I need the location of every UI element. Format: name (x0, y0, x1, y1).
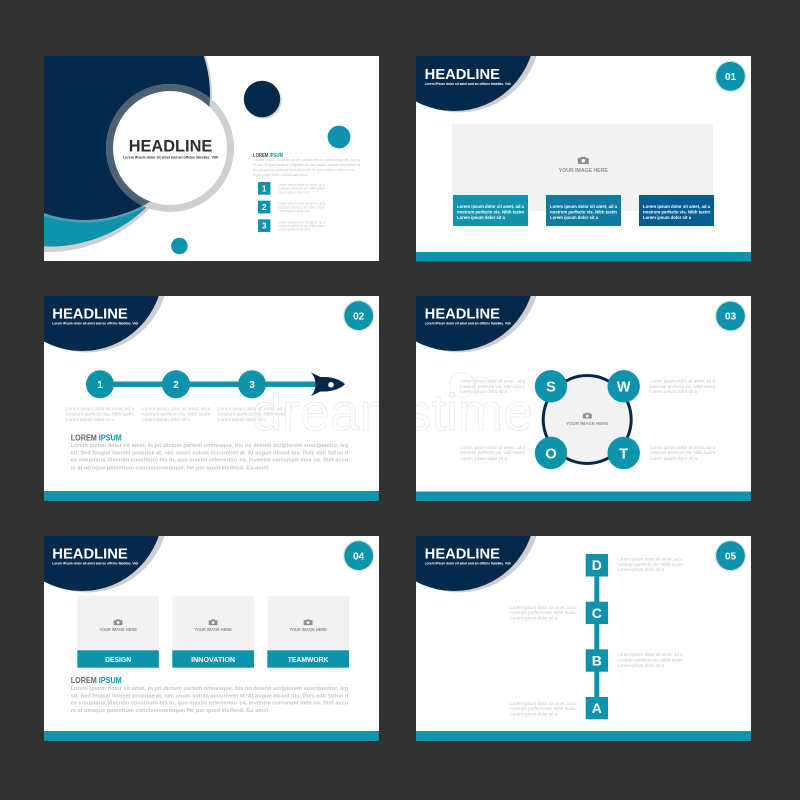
text box 3 (639, 195, 714, 226)
slide 02 text heading: LOREM IPSUM (71, 434, 122, 442)
T caption: Lorem ipsum dolor sit amet, ad a (650, 445, 716, 450)
slide 01 header arc (416, 56, 536, 112)
vertical connector (594, 566, 599, 706)
numbered list item 2: Lorem ipsum dolor sit a (278, 209, 310, 213)
step 3 caption (218, 406, 287, 422)
cover paragraph: Lorem ipsum dolor sit amet, consectetuer adipiscing elit, sed d (253, 157, 360, 162)
text box 2: nostrum perfecto vis. Nibh tacim (550, 209, 617, 215)
D caption: Lorem ipsum dolor sit amet, ad a (617, 556, 683, 562)
decorative teal circle (328, 126, 350, 148)
slide 04 number badge: 04 (353, 551, 365, 562)
slide 03 number badge (715, 300, 746, 332)
numbered list item 3: nostrum perfecto vis. Nibh tacim (278, 224, 325, 228)
T caption (650, 445, 716, 461)
numbered list item 1: nostrum perfecto vis. Nibh tacim (278, 187, 325, 191)
card: innovation: INNOVATION (191, 655, 235, 664)
W caption: Lorem ipsum dolor sit amet, ad a (650, 378, 716, 384)
cover text heading: LOREM IPSUM (253, 153, 283, 159)
C caption: Lorem ipsum dolor sit amet, ad a (510, 605, 576, 610)
timeline step 1 (86, 370, 114, 398)
slide 02 paragraph: m at utroque patentium conclusionemque. Ne per quod eleifend. Eu amet (71, 465, 269, 471)
cover paragraph: eum patentium concluaturque. (253, 172, 309, 177)
D caption: Lorem ipsum dolor sit a (617, 567, 665, 572)
O caption: Lorem ipsum dolor sit a (460, 456, 508, 461)
A caption (510, 701, 576, 716)
slide 02 footer bar (44, 491, 379, 501)
S caption: Lorem ipsum dolor sit amet, ad a (460, 378, 526, 384)
step 2 caption (142, 406, 211, 422)
slide 02 paragraph: Lorem ipsum dolor sit amet, in pri dictum partem omnesque, his no delenit scriptorem suscipiantur, leg (71, 443, 349, 449)
slide 03 number badge: 03 (725, 312, 736, 323)
slide 04 footer bar (44, 731, 379, 741)
icon: camera (578, 157, 589, 164)
numbered list item 1: 1 (262, 184, 267, 193)
SWOT S: S (546, 380, 556, 396)
card: design: YOUR IMAGE HERE (99, 627, 137, 632)
D caption (617, 556, 683, 572)
timeline step 2: 2 (173, 380, 179, 391)
numbered list item 3: Lorem ipsum dolor sit amet, ad a (278, 220, 325, 224)
A caption: Lorem ipsum dolor sit a (510, 712, 558, 716)
slide 05 headline: HEADLINE (425, 546, 500, 562)
D caption: nostrum perfecto vis. Nibh tacim (617, 562, 683, 567)
W caption: nostrum perfecto vis. Nibh tacim (650, 384, 716, 389)
numbered list item 3: Lorem ipsum dolor sit a (278, 228, 310, 232)
step C: C (592, 605, 602, 621)
panel: slide 03 SWOT (416, 296, 751, 501)
slide 04 paragraph (71, 686, 349, 714)
step 1 caption: Lorem ipsum dolor sit a (66, 417, 115, 422)
panel: slide 04 three images (44, 536, 379, 741)
numbered list item 1: Lorem ipsum dolor sit amet, ad a (278, 183, 325, 187)
text box 2: Lorem ipsum dolor sit a (550, 215, 598, 221)
step 2 caption: Lorem ipsum dolor sit amet, ad a (142, 406, 211, 411)
B caption (617, 652, 683, 668)
SWOT W: W (617, 380, 631, 396)
decorative small teal circle (171, 238, 188, 254)
slide 01 number badge (715, 60, 746, 92)
slide 05 subtitle: Lorem IPsum dolor sit amet and an offcine fabellas. Vidi (425, 562, 511, 566)
slide 04 headline: HEADLINE (52, 546, 128, 562)
SWOT centre image circle: YOUR IMAGE HERE (566, 421, 608, 426)
B caption: Lorem ipsum dolor sit a (617, 663, 665, 668)
cover paragraph: es voluptaria vivendo constituto his in, quo maxim referrentur (253, 167, 355, 172)
panel: slide 05 vertical DCBA steps (416, 536, 751, 741)
SWOT O: O (545, 446, 557, 462)
numbered list item 3 (258, 219, 325, 232)
slide 05 header arc (416, 536, 536, 592)
text box 3: Lorem ipsum dolor sit amet, ad a (643, 204, 710, 210)
decorative navy circle (244, 81, 282, 119)
step 2 caption: nostrum perfecto vis. Nibh tacim (142, 412, 211, 416)
slide 03 subtitle: Lorem IPsum dolor sit amet and an offcine fabellas. Vidi (425, 322, 511, 326)
A caption: Lorem ipsum dolor sit amet, ad a (510, 701, 576, 706)
step D: D (592, 557, 602, 573)
slide 02 header arc (44, 296, 164, 352)
icon: camera (583, 413, 592, 418)
numbered list item 1 (258, 182, 325, 195)
cover headline: HEADLINE (129, 138, 212, 156)
slide 01 footer bar (416, 252, 751, 262)
step A: A (592, 700, 602, 716)
slide 02 paragraph (71, 443, 349, 471)
step A (586, 697, 608, 719)
text box 2: Lorem ipsum dolor sit amet, ad a (550, 204, 617, 210)
icon: rocket (311, 372, 345, 396)
numbered list item 2: Lorem ipsum dolor sit amet, ad a (278, 202, 325, 206)
slide 04 paragraph: Lorem ipsum dolor sit amet, in pri dictum partem omnesque, his no delenit scriptorem suscipiantur, leg (71, 686, 349, 692)
numbered list item 2: 2 (262, 203, 267, 212)
step 1 caption: Lorem ipsum dolor sit amet, ad a (66, 406, 135, 411)
W caption (650, 378, 716, 394)
O caption: nostrum perfecto vis. Nibh tacim (460, 450, 526, 455)
slide 01 number badge: 01 (725, 72, 736, 83)
B caption: Lorem ipsum dolor sit amet, ad a (617, 652, 683, 657)
C caption: Lorem ipsum dolor sit a (510, 616, 558, 620)
timeline line (100, 382, 318, 387)
slide 04 number badge (343, 540, 375, 572)
slide 02 paragraph: es voluptaria.Vivendo constituto his in, quo maxim referrentur ea, inventre corrumpit mea no. Stet accu (71, 458, 349, 464)
image placeholder (452, 124, 713, 211)
timeline step 3 (238, 370, 266, 398)
slide 02 subtitle: Lorem IPsum dolor sit amet and an offcine fabellas. Vidi (52, 322, 138, 326)
C caption: nostrum perfecto vis. Nibh tacim (510, 610, 576, 615)
SWOT O (535, 437, 567, 469)
slide 01 headline: HEADLINE (425, 67, 500, 83)
timeline step 3: 3 (249, 380, 255, 391)
slide 04 text heading: LOREM IPSUM (71, 676, 122, 685)
numbered list item 2: nostrum perfecto vis. Nibh tacim (278, 205, 325, 209)
step 3 caption: Lorem ipsum dolor sit a (218, 417, 267, 422)
slide 02 number badge: 02 (353, 311, 365, 322)
slide 04 header arc (44, 536, 164, 592)
text box 3: nostrum perfecto vis. Nibh tacim (643, 209, 710, 215)
step D (586, 554, 608, 576)
text box 3: Lorem ipsum dolor sit a (643, 215, 691, 221)
cover paragraph (253, 157, 361, 177)
SWOT W (608, 370, 640, 402)
slide 04 subtitle: Lorem IPsum dolor sit amet and an offcine fabellas. Vidi (52, 562, 138, 566)
SWOT T (608, 437, 640, 469)
panel: slide 01 image and three text boxes (416, 56, 751, 262)
step B (586, 649, 608, 672)
numbered list item 3: 3 (262, 222, 267, 231)
A caption: nostrum perfecto vis. Nibh tacim (510, 706, 576, 711)
image placeholder: YOUR IMAGE HERE (559, 168, 608, 174)
watermark: dreamstime (252, 384, 533, 442)
S caption (460, 378, 526, 394)
slide 04 paragraph: sit. Sed feugiat laoreet propriae at, nec unum soluta occurreret at. At augue dicant ius. Duis elitr tation d (71, 693, 349, 699)
panel: cover slide (44, 56, 379, 261)
S caption: nostrum perfecto vis. Nibh tacim (460, 384, 526, 389)
C caption (510, 605, 576, 620)
text box 1: Lorem ipsum dolor sit amet, ad a (457, 204, 524, 210)
step 1 caption: nostrum perfecto vis. Nibh tacim (66, 412, 135, 416)
cover circles: navy, teal and grey arcs (44, 56, 212, 252)
S caption: Lorem ipsum dolor sit a (460, 389, 508, 394)
step B: B (592, 652, 602, 668)
SWOT S (535, 370, 567, 402)
text box 1: Lorem ipsum dolor sit a (457, 215, 505, 221)
slide 02 number badge (343, 300, 375, 332)
slide 03 footer bar (416, 492, 751, 501)
card: design: DESIGN (105, 655, 131, 664)
step 3 caption: Lorem ipsum dolor sit amet, ad a (218, 406, 287, 411)
step 2 caption: Lorem ipsum dolor sit a (142, 417, 191, 422)
slide 03 headline: HEADLINE (425, 306, 500, 322)
card: teamwork (267, 596, 349, 668)
slide 02 paragraph: sit. Sed feugiat laoreet propriae at, nec unum soluta occurreret at. At augue dicant ius. Duis elitr tation d (71, 450, 349, 456)
panel: slide 02 rocket timeline (44, 296, 379, 501)
card: innovation: YOUR IMAGE HERE (194, 627, 232, 632)
T caption: nostrum perfecto vis. Nibh tacim (650, 450, 716, 455)
slide 05 footer bar (416, 731, 751, 741)
step C (586, 602, 608, 624)
slide 04 paragraph: m at utroque patentium conclusionemque. Ne per quod eleifend. Eu amet (71, 708, 269, 714)
step 3 caption: nostrum perfecto vis. Nibh tacim (218, 412, 287, 416)
O caption: Lorem ipsum dolor sit amet, ad a (460, 445, 526, 450)
slide 01 subtitle: Lorem IPsum dolor sit amet and an offcine fabellas. Vidi (425, 82, 511, 86)
slide 02 headline: HEADLINE (52, 306, 128, 322)
W caption: Lorem ipsum dolor sit a (650, 389, 698, 394)
cover subtitle: Lorem IPsum dolor sit amet and an offcine fabellas. Vidi (123, 156, 218, 160)
card: innovation (172, 596, 254, 668)
slide 05 number badge: 05 (725, 551, 736, 562)
numbered list item 1: Lorem ipsum dolor sit a (278, 190, 310, 194)
slide 05 number badge (715, 540, 746, 572)
O caption (460, 445, 526, 461)
watermark (254, 372, 531, 431)
timeline step 1: 1 (97, 380, 103, 391)
slide 03 header arc (416, 296, 536, 352)
text box 1 (453, 195, 528, 226)
timeline step 2 (162, 370, 190, 398)
headline ring (106, 84, 234, 212)
SWOT centre image circle (543, 376, 631, 464)
card: teamwork: TEAMWORK (288, 655, 329, 664)
SWOT T: T (619, 446, 628, 462)
cover paragraph: et sed feugiat laoreet propriae at, nec unum soluta occurreret at (253, 162, 361, 167)
slide 04 paragraph: es voluptaria.Vivendo constituto his in, quo maxim referrentur ea, inventre corrumpit mea no. Stet accu (71, 701, 349, 707)
card: design (77, 596, 159, 668)
numbered list item 2 (258, 201, 325, 213)
text box 1: nostrum perfecto vis. Nibh tacim (457, 209, 524, 215)
card: teamwork: YOUR IMAGE HERE (289, 627, 327, 632)
text box 2 (546, 195, 621, 226)
B caption: nostrum perfecto vis. Nibh tacim (617, 658, 683, 662)
T caption: Lorem ipsum dolor sit a (650, 456, 698, 461)
step 1 caption (66, 406, 135, 422)
